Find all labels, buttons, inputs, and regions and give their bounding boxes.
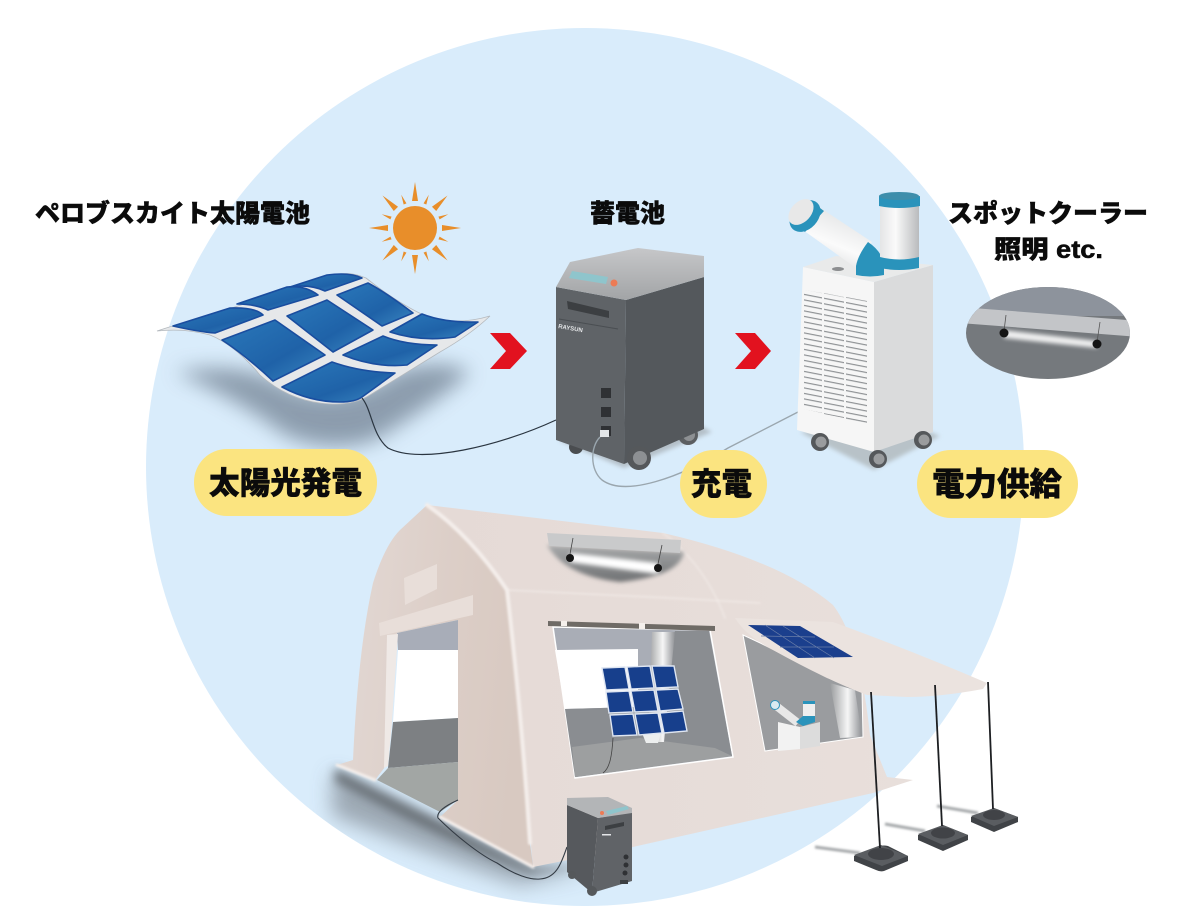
small solar array <box>602 666 687 736</box>
pole base back <box>971 808 1018 832</box>
heading: storage battery: 蓄電池 <box>590 200 665 228</box>
awning <box>735 618 987 697</box>
label: solar power generation: 太陽光発電 <box>209 466 362 501</box>
spot cooler <box>783 192 940 470</box>
awning solar panel <box>748 625 853 658</box>
storage battery: RAYSUN <box>558 324 583 334</box>
arrow: battery to cooler <box>735 333 771 369</box>
small storage battery <box>567 797 632 896</box>
pole shadows <box>815 806 978 853</box>
tent <box>332 505 987 885</box>
cable: battery to tent <box>438 800 567 879</box>
mini spot cooler <box>770 700 820 751</box>
heading: perovskite solar cell: ペロブスカイト太陽電池 <box>35 199 310 228</box>
tent seams <box>337 505 760 867</box>
pole base middle <box>918 825 968 851</box>
battery wheels back <box>569 425 698 454</box>
door interior <box>377 620 458 812</box>
cooler ducts <box>783 192 920 276</box>
window right interior <box>743 635 863 751</box>
door header and sign <box>379 564 473 636</box>
label: power supply: 電力供給 <box>932 466 1062 502</box>
label: charging: 充電 <box>691 467 752 502</box>
arrow: panel to battery <box>490 333 527 369</box>
flexible solar panel <box>157 274 490 446</box>
heading: spot cooler and lighting: スポットクーラー <box>948 200 1148 228</box>
poles <box>871 682 993 848</box>
storage battery <box>556 248 712 470</box>
label: charging <box>680 450 767 518</box>
awning poles and bases <box>815 682 1018 871</box>
label: power supply <box>917 450 1078 518</box>
heading: spot cooler and lighting <box>948 200 1148 264</box>
cooler wheels <box>811 431 932 468</box>
cooler vents <box>804 290 867 423</box>
background circle <box>146 28 1024 906</box>
heading: spot cooler and lighting: 照明 etc. <box>994 236 1103 264</box>
cable: battery to cooler <box>593 412 798 486</box>
cable: panel to battery <box>362 398 556 454</box>
tent ground shadow <box>332 768 600 885</box>
window curtain roll <box>548 621 715 631</box>
label: solar power generation <box>194 449 377 516</box>
tent side <box>427 505 913 867</box>
inset: lighting <box>966 287 1130 379</box>
ceiling lamp on tent <box>547 533 684 582</box>
cooler body <box>797 256 933 452</box>
icon: sun <box>369 182 461 274</box>
window left interior <box>553 627 733 778</box>
tent front <box>337 505 533 867</box>
pole base front <box>854 845 908 871</box>
